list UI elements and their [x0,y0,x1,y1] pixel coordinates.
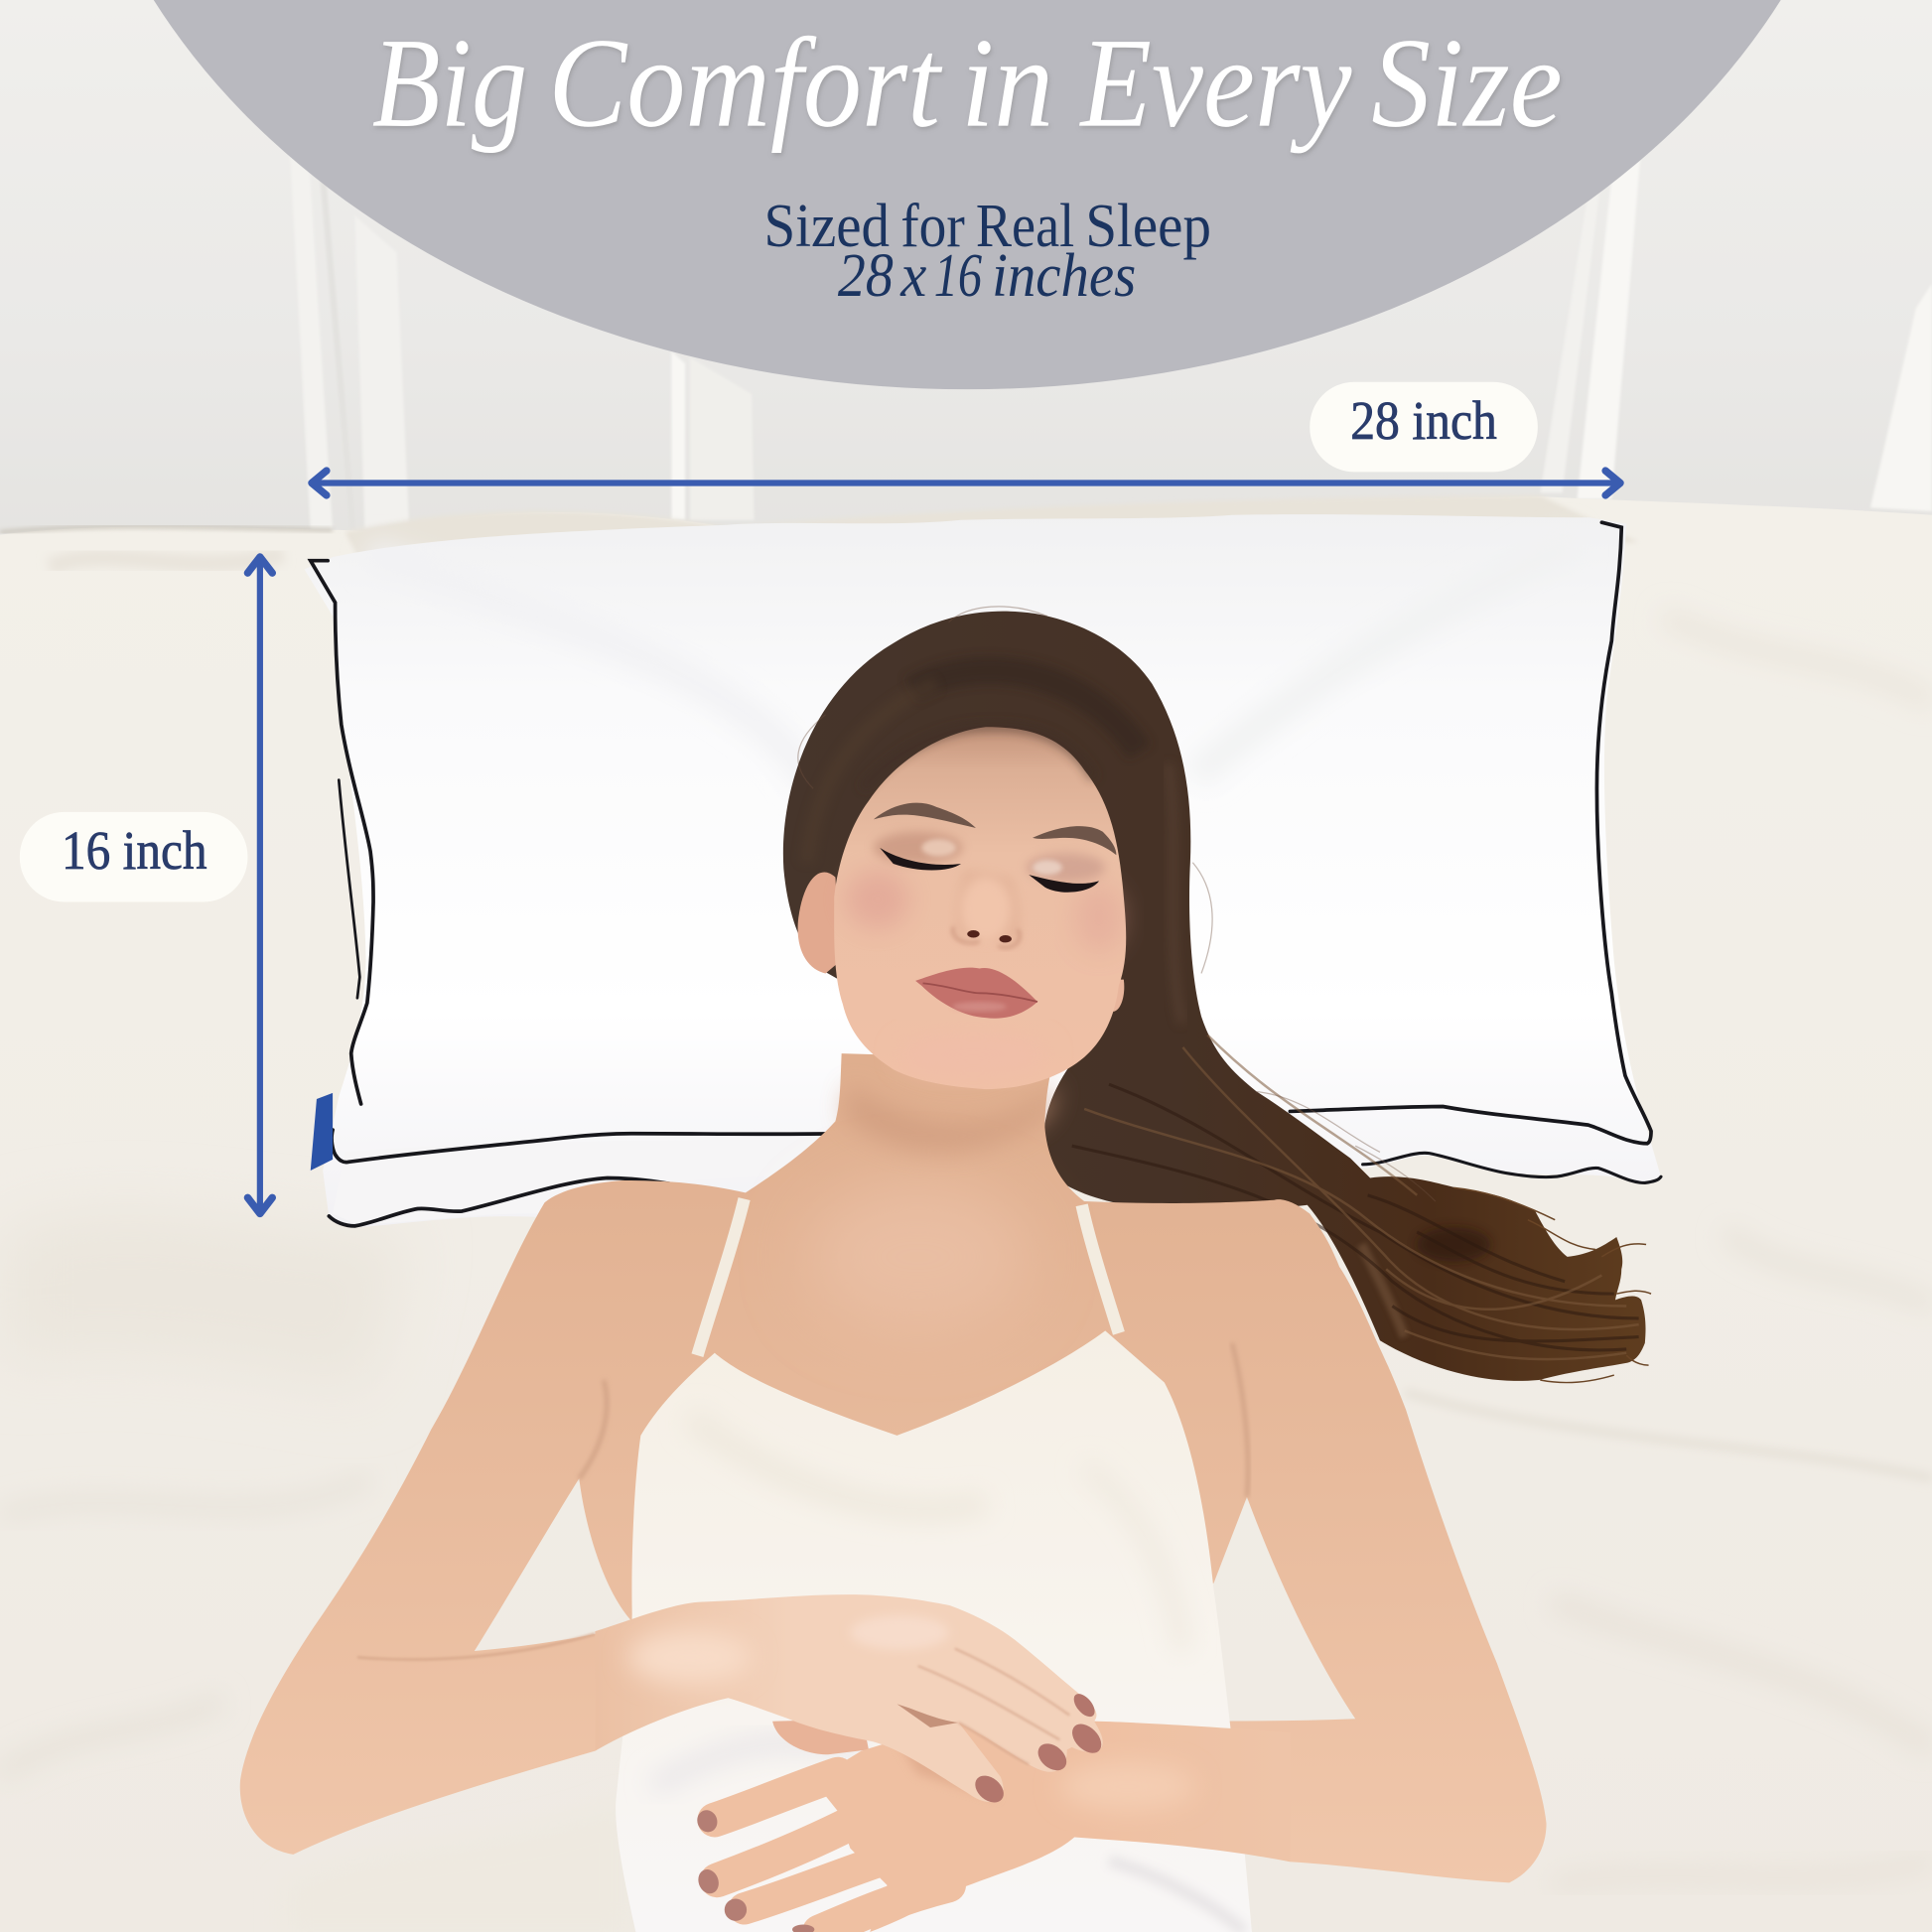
nose [955,869,1021,942]
thumb under upper hand [772,1719,869,1754]
pill label: 16 inch [20,812,247,901]
subtitle: for [900,193,965,260]
lower hand fingers [715,1774,949,1932]
satin dress [616,1199,1252,1932]
hair [783,607,1651,1383]
wall background with panel mouldings [0,0,1932,567]
pillow tag [311,1093,333,1171]
head [798,727,1126,1089]
title: Every [1079,12,1352,154]
size line: 28 [838,242,894,310]
lips [915,968,1037,1019]
eyes closed with lashes [880,848,961,871]
subtitle: Real [976,193,1074,260]
bed sheet [0,495,1932,1932]
title: in [961,12,1053,154]
hair parting shadow at hairline [863,727,1094,788]
pill label: 28 inch [1310,382,1538,472]
pillow [305,514,1661,1227]
size line [838,242,1136,310]
grey header semicircle [66,0,1869,389]
subtitle [763,193,1211,260]
finger creases [918,1649,1069,1764]
subtitle: Sleep [1085,193,1211,260]
pill label: 16 inch: 16 inch [62,820,207,881]
eyeshadow [874,832,962,864]
pillow piping [311,522,1661,1226]
ears [798,873,840,973]
pill label: 28 inch: 28 inch [1350,390,1497,451]
title: Comfort [548,12,943,154]
size line: x [899,242,927,310]
lower hand nails [694,1807,814,1932]
upper hand and left forearm [595,1594,1107,1808]
subtitle: Sized [763,193,890,260]
eyebrows [874,803,976,828]
shoulders, chest and arms [240,1053,1547,1882]
title [372,12,1563,154]
size line: inches [992,242,1136,310]
dress straps [697,1199,745,1355]
lower hand and right forearm [694,1713,1290,1932]
pillow body [305,514,1661,1227]
size line: 16 [934,242,982,310]
face [834,727,1126,1089]
horizontal arrow: width [312,471,1620,495]
title: Big [372,12,527,154]
vertical arrow: height [247,557,272,1213]
title: Size [1371,12,1563,154]
woman [240,607,1651,1932]
upper hand nails [970,1690,1107,1808]
